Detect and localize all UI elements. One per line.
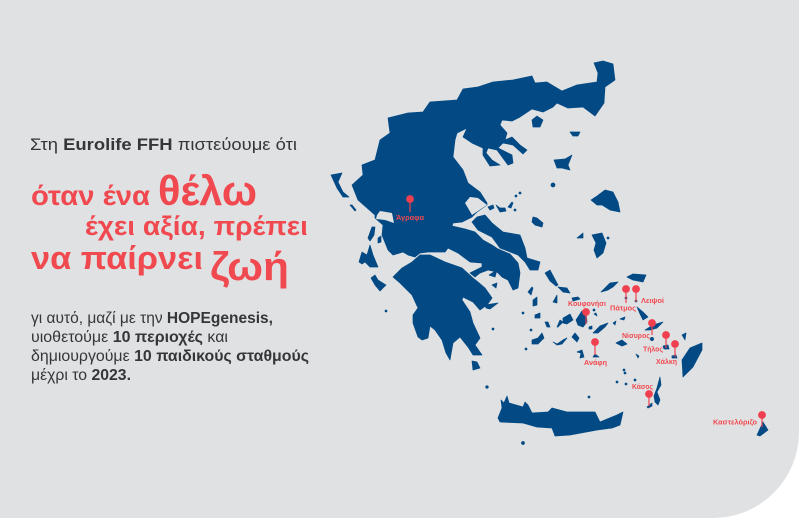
headline: θέλω xyxy=(158,167,257,214)
Rhodes xyxy=(682,343,702,377)
headline: ζωή xyxy=(210,245,289,289)
intro line: Στη Eurolife FFH πιστεύουμε ότι xyxy=(30,136,297,154)
mainland xyxy=(352,61,615,290)
pin: Καστελόριζο: Καστελόριζο xyxy=(713,418,757,426)
Euboea xyxy=(472,215,540,270)
pin: Νίσυρος: Νίσυρος xyxy=(622,331,650,340)
pin: Άγραφα xyxy=(396,195,424,222)
pin: Καστελόριζο xyxy=(713,411,766,427)
pin: Λειψοί xyxy=(632,285,664,305)
pin: Τήλος: Τήλος xyxy=(643,344,663,354)
Pagasetic gulf xyxy=(465,197,487,215)
Aegean islands xyxy=(472,183,768,444)
pin: Άγραφα: Άγραφα xyxy=(396,213,424,222)
Ionian islands xyxy=(331,173,392,312)
body text xyxy=(31,310,309,384)
headline: έχει αξία, πρέπει xyxy=(85,211,308,241)
pin: Νίσυρος xyxy=(622,319,656,340)
body text: μέχρι το 2023. xyxy=(31,367,131,384)
headline xyxy=(31,167,308,289)
map of Greece xyxy=(331,61,768,444)
body text: γι αυτό, μαζί με την HOPEgenesis, xyxy=(31,310,273,327)
headline: όταν ένα xyxy=(31,180,150,211)
pin: Λειψοί: Λειψοί xyxy=(641,296,664,305)
pin: Πάτμος xyxy=(610,285,636,312)
Samothrace xyxy=(570,132,580,136)
pin: Κάσος: Κάσος xyxy=(632,382,653,391)
body text: υιοθετούμε 10 περιοχές και xyxy=(31,329,228,346)
Chios xyxy=(592,233,606,258)
Ambracian gulf xyxy=(376,211,394,223)
Thasos xyxy=(532,116,543,127)
pin: Χάλκη: Χάλκη xyxy=(656,357,677,366)
body text: δημιουργούμε 10 παιδικούς σταθμούς xyxy=(31,348,309,365)
pin: Ανάφη xyxy=(584,338,607,367)
pin: Τήλος xyxy=(643,331,670,354)
pin: Κουφονήσι xyxy=(568,299,606,324)
pin: Πάτμος: Πάτμος xyxy=(610,304,636,312)
Lesvos xyxy=(591,190,620,212)
pin: Ανάφη: Ανάφη xyxy=(584,358,607,367)
Peloponnese xyxy=(393,255,492,360)
pin: Κουφονήσι: Κουφονήσι xyxy=(568,299,606,308)
pin: Χάλκη xyxy=(656,340,679,366)
Lemnos xyxy=(554,155,572,170)
headline: να παίρνει xyxy=(31,240,203,276)
Crete xyxy=(498,396,623,436)
pin: Κάσος xyxy=(632,382,653,406)
